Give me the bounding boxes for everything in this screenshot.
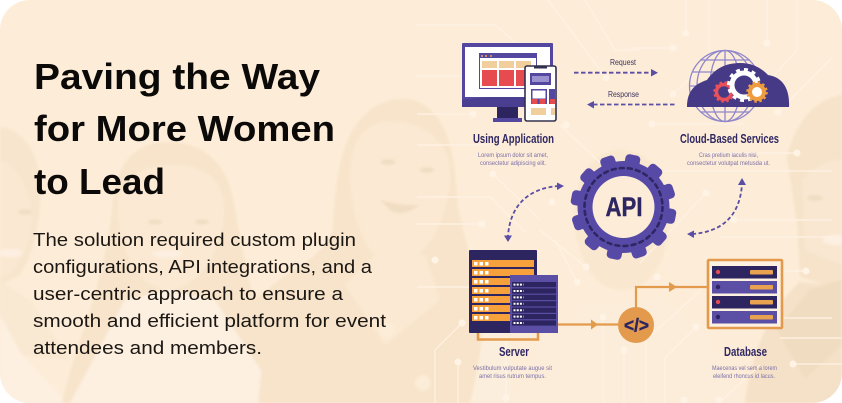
body text: user-centric approach to ensure a xyxy=(33,284,344,304)
icon: database xyxy=(708,260,782,328)
label: cloud-based services: consectetur volutpat metusda ut. xyxy=(687,160,770,167)
icon: API gear: API xyxy=(606,192,642,222)
title: Paving the Way xyxy=(34,56,320,97)
body text: configurations, API integrations, and a xyxy=(33,257,373,277)
label: cloud-based services xyxy=(680,132,779,167)
arrow: response xyxy=(587,90,675,108)
label: using application: Using Application xyxy=(473,132,554,146)
label: server xyxy=(473,345,552,380)
label: cloud-based services: Cloud-Based Services xyxy=(680,132,779,146)
label: database: eleifend rhoncus id lacus. xyxy=(713,373,775,380)
icon: code badge xyxy=(618,307,654,343)
label: database: Maecenas vel sem a lorem xyxy=(712,365,777,372)
circuit nodes xyxy=(432,30,810,403)
label: using application xyxy=(473,132,554,167)
label: cloud-based services: Cras pretium iaculis nisi, xyxy=(699,152,758,159)
icon: cloud services xyxy=(687,50,789,122)
label: using application: Lorem ipsum dolor sit amet, xyxy=(478,152,548,159)
connector: server to code to database xyxy=(558,282,708,330)
icon: API gear xyxy=(570,154,677,260)
body text: smooth and efficient platform for event xyxy=(33,311,386,331)
title: to Lead xyxy=(34,161,165,202)
icon: monitor and phone application xyxy=(462,43,556,122)
body text: The solution required custom plugin xyxy=(33,230,356,250)
title: for More Women xyxy=(34,108,335,149)
label: server: amet risus rutrum tempus. xyxy=(479,373,546,380)
arrow: request xyxy=(574,58,658,76)
body text: attendees and members. xyxy=(33,338,262,358)
arrow: API to cloud xyxy=(687,178,746,238)
label: using application: consectetur adipiscing elit. xyxy=(480,160,546,167)
icon: code badge: </> xyxy=(624,316,649,336)
arrow: response: Response xyxy=(608,90,639,99)
label: server: Vestibulum vulputate augue sit xyxy=(473,365,552,372)
body text xyxy=(33,230,386,358)
title xyxy=(34,62,333,194)
circuit lines xyxy=(417,0,842,403)
label: server: Server xyxy=(499,345,529,359)
label: database xyxy=(712,346,777,378)
arrow: request: Request xyxy=(610,58,637,67)
icon: server xyxy=(469,250,558,340)
label: database: Database xyxy=(724,345,767,359)
arrow: API to server xyxy=(504,182,564,242)
background photo: women silhouettes xyxy=(0,95,842,403)
